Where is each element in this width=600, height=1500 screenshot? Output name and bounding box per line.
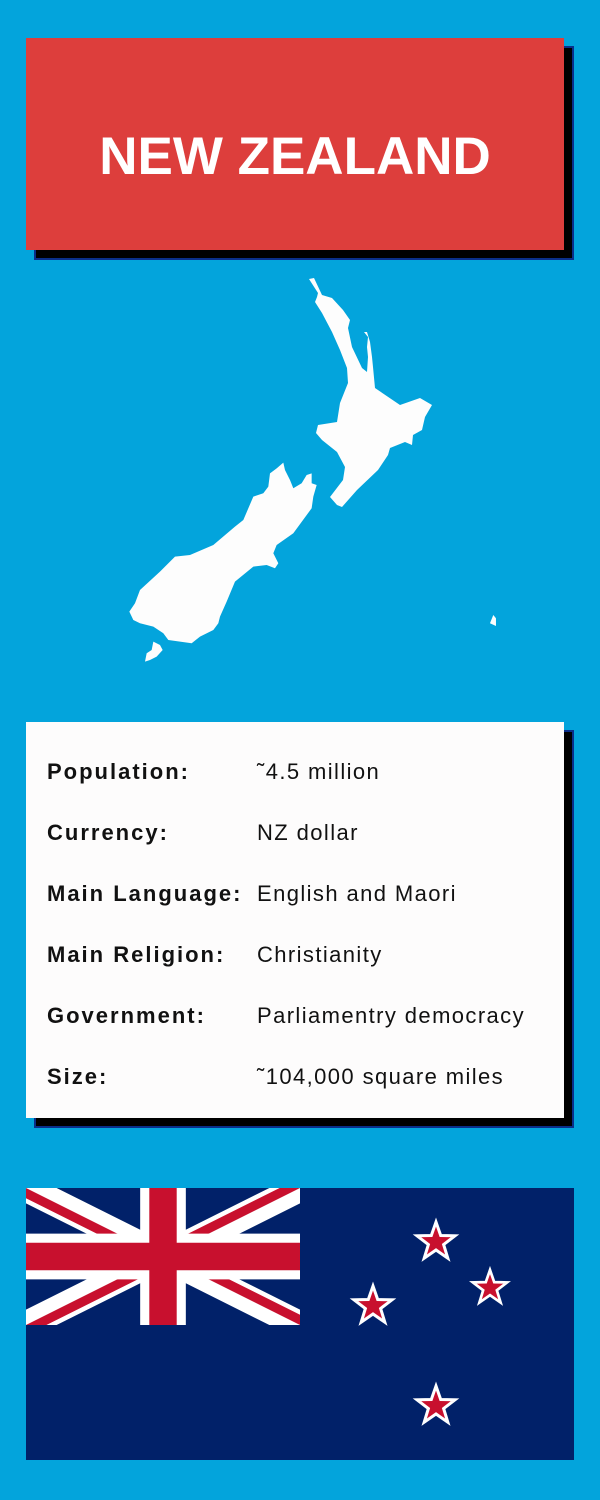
row: size: ˜104,000 square miles [257, 1064, 504, 1089]
row: government: Parliamentry democracy [257, 1003, 525, 1028]
map of New Zealand [129, 278, 496, 662]
info panel [26, 722, 564, 1118]
title [26, 38, 564, 250]
row: size [47, 1064, 504, 1089]
row: government: Government: [47, 1003, 206, 1028]
stewart island [145, 642, 163, 662]
row: currency: NZ dollar [257, 820, 359, 845]
row: main language: English and Maori [257, 881, 457, 906]
row: size: Size: [47, 1064, 108, 1089]
stars: southern cross [354, 1222, 507, 1422]
row: main language [47, 881, 457, 906]
flag of New Zealand [26, 1188, 574, 1460]
row: government [47, 1003, 525, 1028]
title shadow [34, 46, 574, 260]
title: NEW ZEALAND [99, 127, 491, 186]
north island [309, 278, 432, 507]
row: main religion: Christianity [257, 942, 383, 967]
chatham island [490, 615, 496, 626]
info panel shadow [34, 730, 574, 1128]
row: population: ˜4.5 million [257, 759, 380, 784]
row: currency [47, 820, 359, 845]
row: main language: Main Language: [47, 881, 242, 906]
south island [129, 463, 317, 643]
row: currency: Currency: [47, 820, 169, 845]
row: main religion: Main Religion: [47, 942, 225, 967]
row: population: Population: [47, 759, 190, 784]
row: population [47, 759, 380, 784]
union jack [26, 1188, 300, 1325]
row: main religion [47, 942, 383, 967]
